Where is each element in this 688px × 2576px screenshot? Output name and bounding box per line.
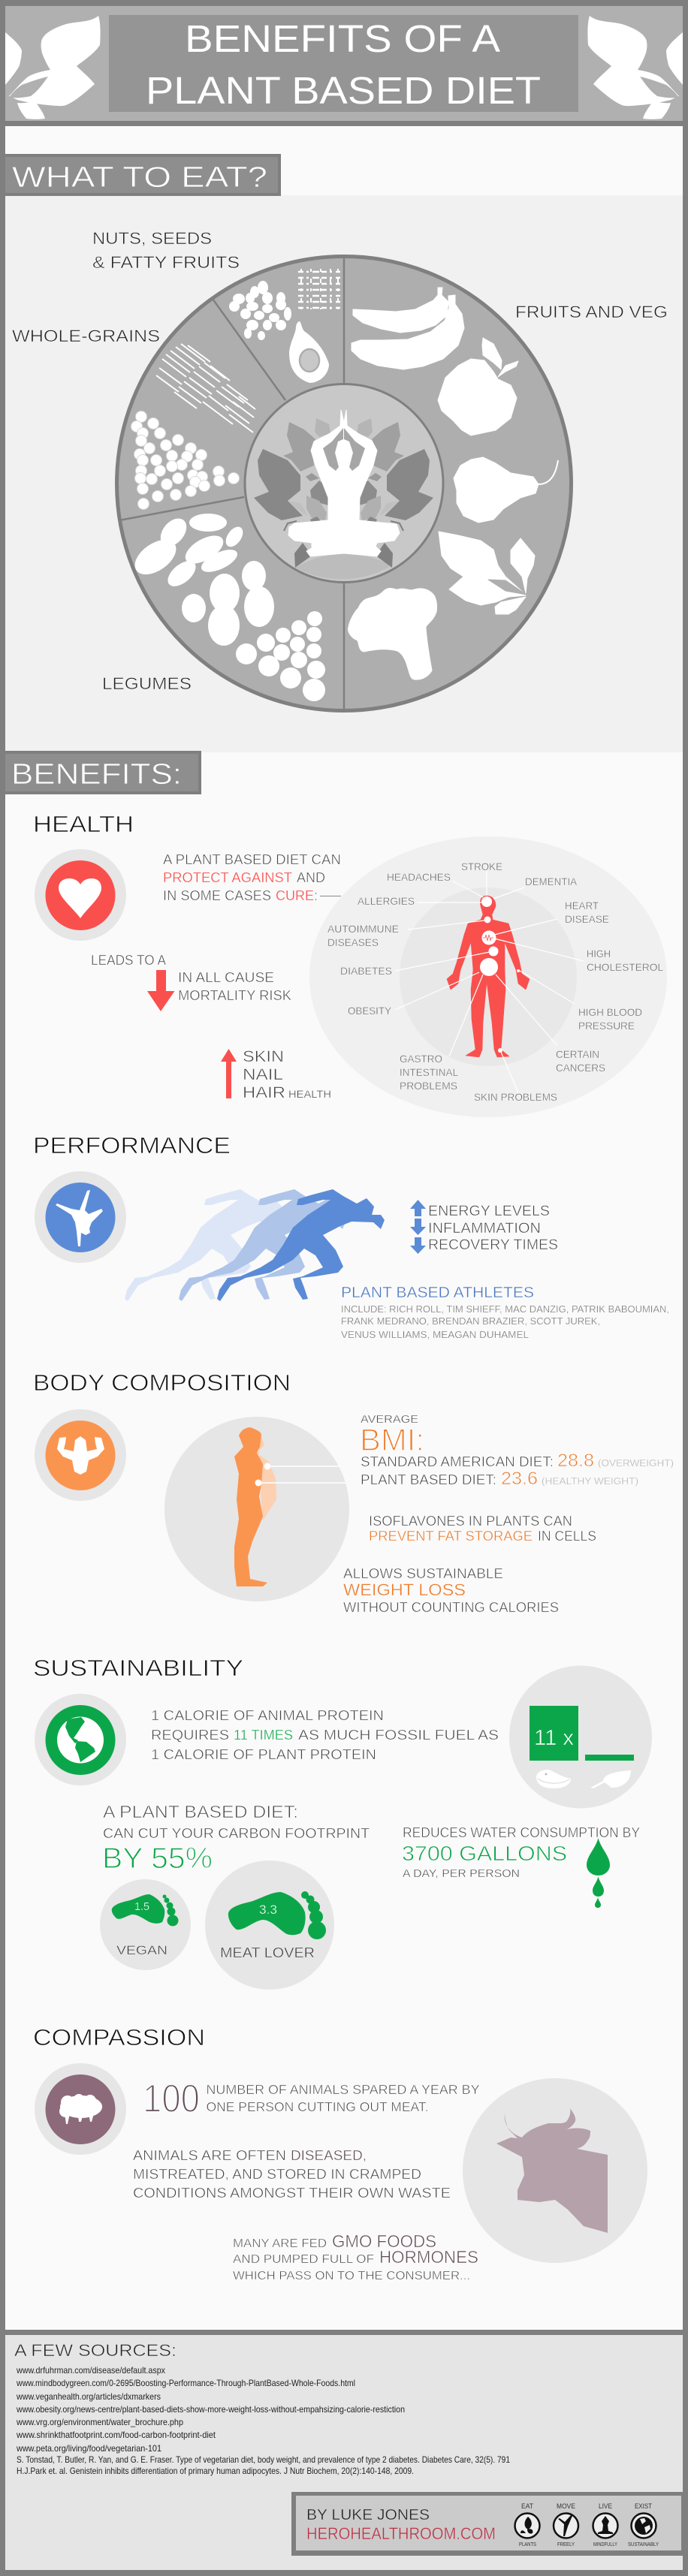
text: average bmi: 28.8 [557,1451,594,1471]
text: 100 animals spared: ONE PERSON CUTTING OUT MEAT. [206,2099,428,2114]
text: protect against and cure: : [314,888,318,903]
icon: chickpeas [182,561,274,646]
label: fruits and veg: FRUITS AND VEG [515,303,668,321]
icon: meat [536,1770,571,1788]
labels: conditions: INTESTINAL [400,1066,458,1078]
text: gmo foods and hormones: HORMONES [379,2247,478,2267]
icon: whole grain sticks [156,344,255,432]
icon: nuts [229,281,291,340]
title box: PLANT BASED DIET [146,69,541,112]
labels: conditions: HIGH [587,948,611,960]
text: average bmi: AVERAGE [361,1414,418,1426]
icon: right leaves [587,16,683,119]
text: gmo foods and hormones: WHICH PASS ON TO THE CONSUMER... [233,2270,470,2282]
heading: a few sources: A FEW SOURCES: [14,2341,177,2360]
icon: pear [454,457,539,523]
text: carbon footprint [102,1802,370,1875]
icon: leaf [590,1770,631,1788]
food wheel chart [117,255,571,711]
labels: conditions: PROBLEMS [400,1080,457,1092]
text: plant based athletes: FRANK MEDRANO, BRENDAN BRAZIER, SCOTT JUREK, [341,1316,600,1327]
labels: conditions: SKIN PROBLEMS [474,1091,557,1103]
text: fossil fuel: 1 CALORIE OF PLANT PROTEIN [151,1746,376,1762]
text: diseased animals [133,2147,451,2201]
body profile illustration [164,1417,349,1601]
icon: orange body profile [234,1427,267,1586]
heading: benefits: BENEFITS: [11,758,182,791]
text: protect against and cure: IN SOME CASES [163,888,271,903]
icon: leaves [439,532,535,614]
header banner [5,6,683,121]
text: average bmi: 23.6 [501,1469,538,1489]
text: average bmi: (OVERWEIGHT) [598,1457,674,1469]
labels: conditions: HEART [565,899,599,911]
text: 100 animals spared [143,2077,480,2121]
icon: faint runner [125,1189,292,1301]
icon: athlete [35,1171,126,1263]
text: water consumption: 3700 GALLONS [402,1842,567,1865]
icon: grains [131,411,239,509]
text: source list: S. Tonstad, T. Butler, R. Yan, and G. E. Fraser. Type of vegetarian diet, body weight, and prevalence of type 2 diabetes. Diabetes Care, 32(5). 791 [17,2454,510,2465]
heading: what to eat: WHAT TO EAT? [12,161,267,194]
icon: eat plants: PLANTS [519,2541,536,2547]
text: water consumption: REDUCES WATER CONSUMPTION BY [403,1825,640,1840]
text: diseased animals: CONDITIONS AMONGST THEIR OWN WASTE [133,2185,451,2201]
labels: conditions: STROKE [461,860,502,872]
icon: avocado [289,321,329,383]
icon: red body figure [447,896,530,1057]
text: protect against and cure: AND [297,870,325,885]
text: water consumption [402,1825,640,1880]
text: leads to a: LEADS TO A [91,953,166,968]
text: isoflavones: ISOFLAVONES IN PLANTS CAN [369,1514,572,1529]
text: isoflavones [369,1514,596,1544]
text: carbon footprint: A PLANT BASED DIET: [103,1802,298,1821]
text: average bmi: STANDARD AMERICAN DIET: [361,1454,554,1469]
icon: exist sustainably: SUSTAINABLY [628,2541,659,2547]
labels: conditions: CERTAIN [556,1048,599,1060]
text: source list: www.drfuhrman.com/disease/default.aspx [16,2365,165,2376]
icon: live mindfully: LIVE [599,2502,612,2510]
labels: conditions [327,860,663,1103]
label: nuts, seeds and fatty fruits: & FATTY FRUITS [92,253,240,272]
label: nuts, seeds and fatty fruits: NUTS, SEEDS [92,229,212,248]
section heading: sustainability: SUSTAINABILITY [33,1655,243,1681]
labels: conditions: GASTRO [400,1053,442,1065]
text: source list: www.peta.org/living/food/vegetarian-101 [16,2443,161,2454]
text: average bmi [360,1414,674,1489]
section heading: health: HEALTH [33,811,134,837]
icon: live mindfully: MINDFULLY [593,2541,617,2547]
labels: conditions: DIABETES [340,965,392,977]
icon: exist sustainably [628,2502,659,2547]
icon: eat plants [515,2502,539,2547]
footprint: vegan: 1.5 [134,1900,149,1913]
text: gmo foods and hormones: AND PUMPED FULL OF [233,2253,374,2266]
icon: cow [463,2078,647,2263]
text: mortality risk: MORTALITY RISK [178,988,291,1003]
text: average bmi: PLANT BASED DIET: [361,1472,496,1487]
heading: what to eat [5,154,281,196]
icon: muscle man [35,1409,126,1501]
icon: live mindfully [593,2502,617,2547]
connector lines and organ markers [395,871,584,1096]
text: source list: www.veganhealth.org/articles/dxmarkers [16,2391,161,2402]
text: skin nail hair health: SKIN [243,1047,284,1065]
text: diseased animals: MISTREATED, AND STORED IN CRAMPED [133,2166,421,2182]
labels: conditions: DISEASES [327,936,379,948]
footprint: vegan: VEGAN [116,1943,167,1957]
text: skin nail hair health: HEALTH [288,1089,331,1100]
icon: pear stem [539,460,558,484]
text: plant based athletes: PLANT BASED ATHLETES [341,1285,534,1301]
text: gmo foods and hormones: MANY ARE FED [233,2237,327,2250]
text: diseased animals: DISEASED, [291,2147,367,2163]
text: weight loss: WEIGHT LOSS [343,1580,466,1599]
text: protect against and cure: CURE [276,888,314,903]
center circle with yoga figure [245,384,443,583]
labels: conditions: CHOLESTEROL [587,961,663,973]
text: performance effects: RECOVERY TIMES [428,1237,558,1253]
text: source list: www.shrinkthatfootprint.com/food-carbon-footprint-diet [16,2430,216,2440]
heading: benefits [5,751,201,794]
icons: fruits and vegetables [349,288,558,679]
icon: seeds [298,269,340,309]
label: whole-grains: WHOLE-GRAINS [12,327,160,345]
text: skin nail hair health: NAIL [243,1065,283,1083]
labels: conditions: AUTOIMMUNE [327,923,399,935]
icon: heart [35,849,126,941]
text: weight loss: WITHOUT COUNTING CALORIES [343,1600,559,1615]
icon: water drops [587,1838,610,1908]
label: legumes: LEGUMES [102,674,192,693]
text: fossil fuel: REQUIRES [151,1727,229,1743]
text: plant based athletes: VENUS WILLIAMS, MEAGAN DUHAMEL [341,1330,529,1340]
icon: move freely: MOVE [557,2502,575,2510]
runners illustration [125,1189,385,1301]
text: source list: www.mindbodygreen.com/0-2695/Boosting-Performance-Through-PlantBased-Whole-Foods.html [16,2378,355,2388]
icon: move freely [554,2502,578,2547]
text: carbon footprint: BY 55% [102,1842,213,1875]
text: skin nail hair health [243,1047,331,1101]
text: diseased animals: ANIMALS ARE OFTEN [133,2147,286,2163]
text: weight loss: ALLOWS SUSTAINABLE [343,1566,503,1581]
text: 100 animals spared: NUMBER OF ANIMALS SPARED A YEAR BY [206,2082,480,2097]
labels: conditions: OBESITY [348,1005,392,1017]
icon: kidney beans [128,514,246,591]
text: performance effects [428,1204,558,1253]
icon: bananas [352,288,464,369]
text: average bmi: BMI: [360,1422,424,1457]
label: nuts, seeds and fatty fruits [92,229,240,272]
text: plant based athletes: INCLUDE: RICH ROLL, TIM SHIEFF, MAC DANZIG, PATRIK BABOUMIAN, [341,1304,669,1315]
icon: move freely: FREELY [557,2541,575,2547]
text: isoflavones: PREVENT FAT STORAGE [369,1529,533,1544]
arrow: up [221,1049,237,1098]
lotus left side [254,418,330,568]
text: fossil fuel: AS MUCH FOSSIL FUEL AS [298,1727,499,1743]
icon: overweight outline [257,1429,276,1520]
icon: globe [35,1694,126,1785]
labels: conditions: DISEASE [565,913,609,925]
icon: eat plants: EAT [521,2502,533,2510]
labels: conditions: HIGH BLOOD [578,1006,642,1018]
text: mortality risk [178,970,291,1003]
body diagram with conditions [309,836,667,1117]
panel: sources [5,2335,683,2570]
bar chart: 11x comparison: 11 x [534,1726,574,1750]
icon: broccoli [349,589,437,679]
text: gmo foods and hormones [233,2231,478,2282]
text: carbon footprint: CAN CUT YOUR CARBON FOOTRPINT [103,1825,370,1841]
panel: author credit [291,2492,683,2556]
text: protect against and cure: A PLANT BASED DIET CAN [163,852,341,867]
text: plant based athletes [341,1285,669,1340]
icon: peas [236,611,325,701]
icon: apple [438,338,518,435]
text: average bmi: (HEALTHY WEIGHT) [542,1475,638,1487]
icon: yoga figure [288,410,400,556]
text: source list: www.vrg.org/environment/water_brochure.php [16,2417,183,2427]
text: fossil fuel: 11 TIMES [234,1727,293,1743]
labels: conditions: CANCERS [556,1062,605,1074]
icon: lotus petals [254,418,433,579]
text: performance effects: ENERGY LEVELS [428,1204,550,1219]
title box: BENEFITS OF A [185,17,500,60]
panel: author credit: HEROHEALTHROOM.COM [306,2524,496,2543]
text: water consumption: A DAY, PER PERSON [403,1867,520,1880]
text: protect against and cure: PROTECT AGAINST [163,870,292,885]
icon: left leaves [5,16,101,119]
labels: conditions: DEMENTIA [525,875,578,887]
footprint: vegan [100,1879,191,1970]
panel: author credit: BY LUKE JONES [306,2506,430,2523]
footprint: meat lover: MEAT LOVER [220,1945,315,1960]
icon: sheep [35,2063,126,2155]
icon: front runner [217,1189,385,1301]
arrows: energy, inflammation, recovery [410,1200,426,1254]
text: protect against and cure [163,852,341,903]
markers: body points [255,1463,346,1487]
text: source list: www.obesity.org/news-centre/plant-based-diets-show-more-weight-loss-without-empahsizing-calorie-restiction [16,2404,405,2415]
text: performance effects: INFLAMMATION [428,1221,541,1237]
icon: exist sustainably: EXIST [635,2502,652,2510]
text: gmo foods and hormones: GMO FOODS [332,2231,436,2251]
text: mortality risk: IN ALL CAUSE [178,970,274,985]
text: weight loss [343,1566,559,1615]
arrow: down [147,970,174,1011]
section heading: body composition: BODY COMPOSITION [33,1369,291,1396]
labels: conditions: ALLERGIES [358,895,415,907]
text: skin nail hair health: HAIR [243,1083,285,1101]
text: fossil fuel [151,1707,499,1762]
icons: legumes [128,514,325,701]
title box [109,15,578,112]
footprint: meat lover: 3.3 [259,1903,277,1917]
labels: conditions: PRESSURE [578,1020,635,1032]
text: source list: H.J.Park et. al. Genistein inhibits differentiation of primary human adipocytes. J Nutr Biochem, 20(2):140-148, 2009. [17,2466,414,2476]
labels: conditions: HEADACHES [387,871,451,883]
text: source list [16,2365,510,2476]
text: fossil fuel: 1 CALORIE OF ANIMAL PROTEIN [151,1707,384,1723]
section heading: compassion: COMPASSION [33,2024,205,2050]
section heading: performance: PERFORMANCE [33,1132,231,1158]
bar chart: 11x comparison [509,1665,652,1808]
footprint: meat lover [205,1860,334,1990]
lotus right side [357,418,433,568]
icon: mid runner [179,1189,346,1301]
text: isoflavones: IN CELLS [538,1529,596,1544]
text: 100 animals spared: 100 [143,2077,200,2121]
